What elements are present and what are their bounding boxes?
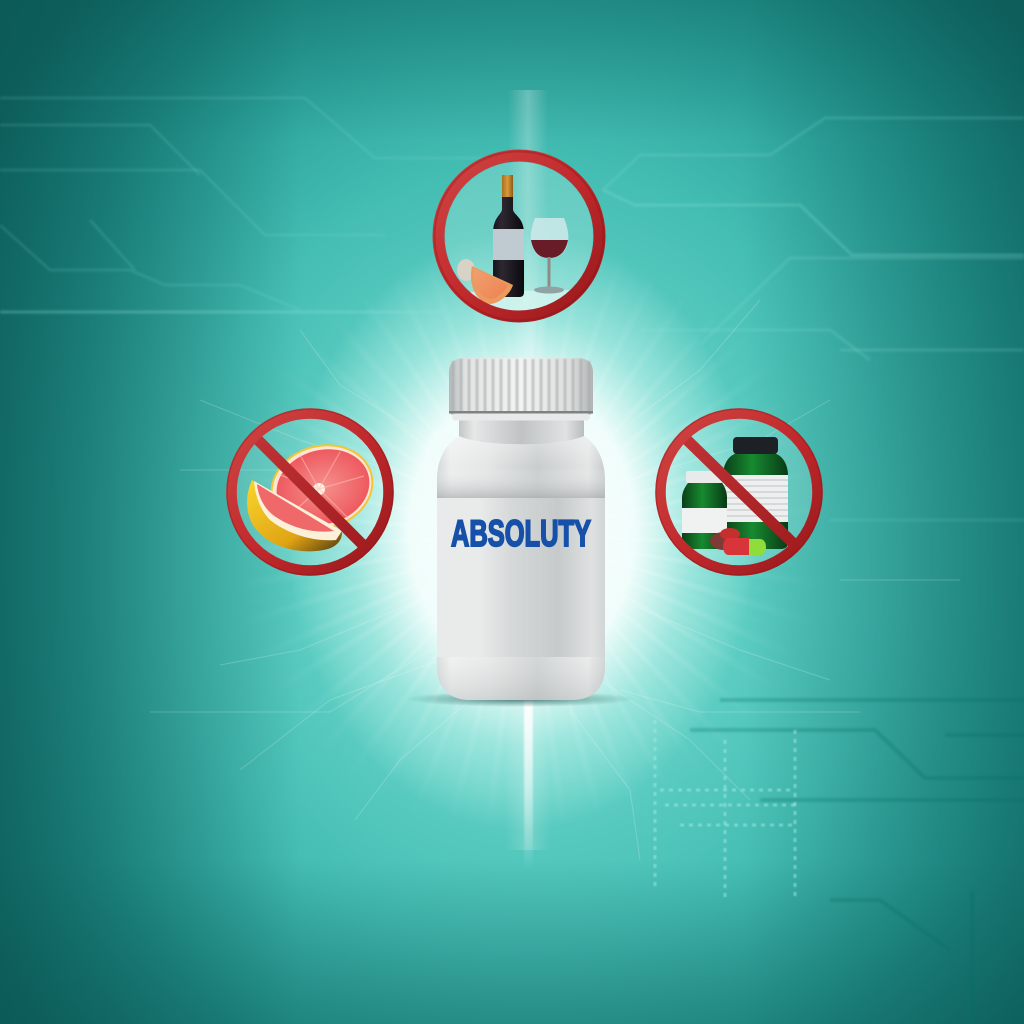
prohibition icon: supplements	[656, 409, 822, 575]
table surface	[465, 290, 570, 312]
grapefruit half	[261, 433, 383, 541]
red ring and slash	[227, 409, 393, 575]
shoulder shading	[437, 436, 605, 498]
circuit texture: lower centre	[655, 720, 800, 900]
circuit traces: upper left	[0, 98, 500, 312]
vertical light beam	[505, 90, 551, 870]
light burst rays	[282, 333, 769, 744]
thin radial filaments	[150, 300, 960, 860]
red ring	[434, 152, 604, 320]
bottle shadow	[405, 691, 635, 707]
grapefruit wedge	[457, 259, 513, 304]
bottle body	[437, 436, 605, 700]
capsules	[710, 528, 766, 555]
large supplement jar	[723, 437, 788, 549]
brand name: ABSOLUTY	[451, 513, 591, 554]
prohibition icon: wine and grapefruit	[434, 152, 604, 320]
bottle base shading	[437, 657, 605, 700]
bottle neck	[459, 412, 584, 446]
circuit traces: lower right	[690, 700, 1024, 1024]
circuit traces: upper right	[603, 118, 1024, 520]
small supplement jar	[682, 471, 727, 549]
cap	[449, 358, 593, 420]
wine bottle	[493, 175, 524, 297]
grapefruit wedge	[247, 480, 342, 551]
product bottle	[437, 358, 605, 700]
red ring and slash	[656, 409, 822, 575]
wine glass	[531, 218, 568, 294]
prohibition icon: grapefruit	[227, 409, 393, 575]
bottle label band	[437, 498, 605, 657]
